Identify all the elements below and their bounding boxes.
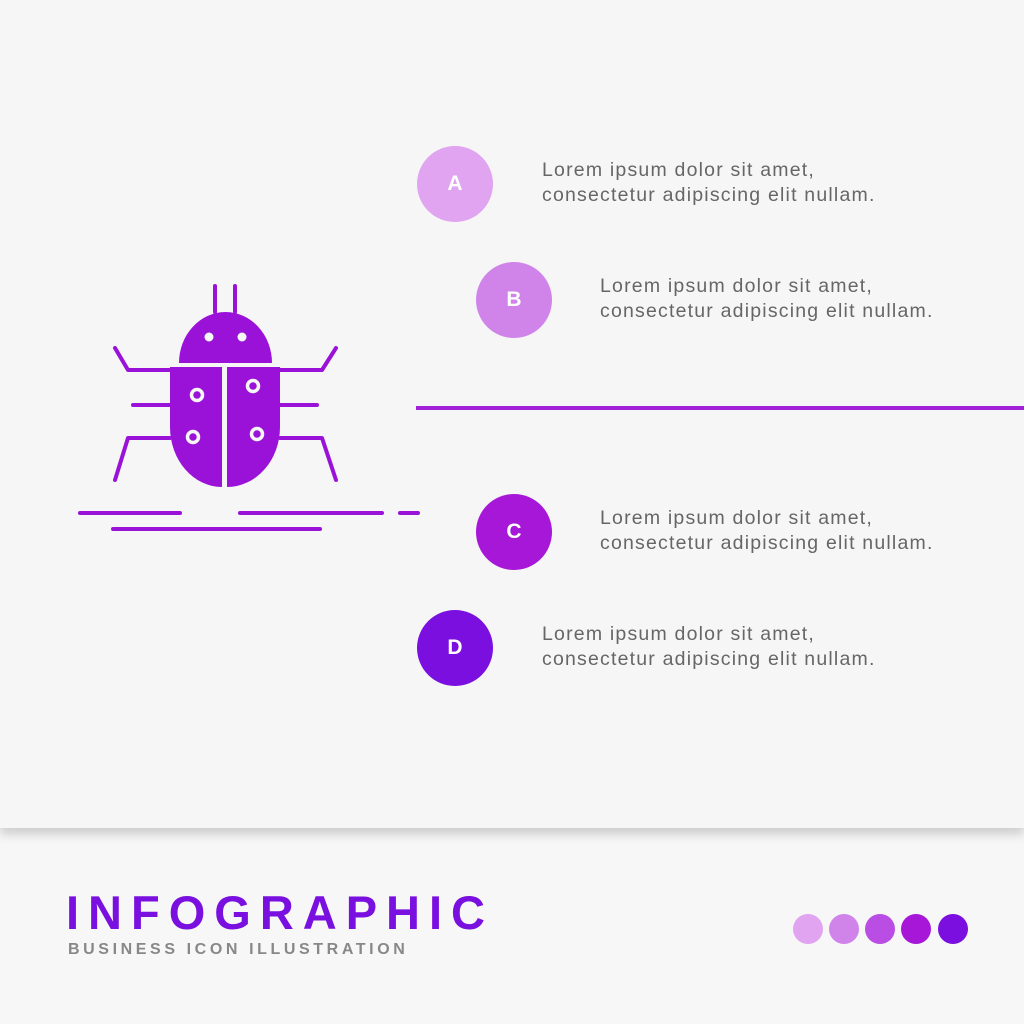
color dots: [793, 914, 968, 944]
subtitle: BUSINESS ICON ILLUSTRATION: [68, 941, 408, 958]
text: Lorem ipsum dolor sit amet,: [542, 159, 815, 181]
text: consectetur adipiscing elit nullam.: [542, 648, 876, 670]
text: Lorem ipsum dolor sit amet,: [542, 623, 815, 645]
text: consectetur adipiscing elit nullam.: [600, 300, 934, 322]
text: A: [447, 172, 463, 195]
text: consectetur adipiscing elit nullam.: [600, 532, 934, 554]
text: consectetur adipiscing elit nullam.: [542, 184, 876, 206]
text: Lorem ipsum dolor sit amet,: [600, 507, 873, 529]
step C: [476, 494, 934, 570]
text: D: [447, 636, 463, 659]
step B: [476, 262, 934, 338]
text: B: [506, 288, 522, 311]
text: Lorem ipsum dolor sit amet,: [600, 275, 873, 297]
text: C: [506, 520, 522, 543]
step A: [417, 146, 876, 222]
step D: [417, 610, 876, 686]
title: INFOGRAPHIC: [66, 886, 494, 939]
